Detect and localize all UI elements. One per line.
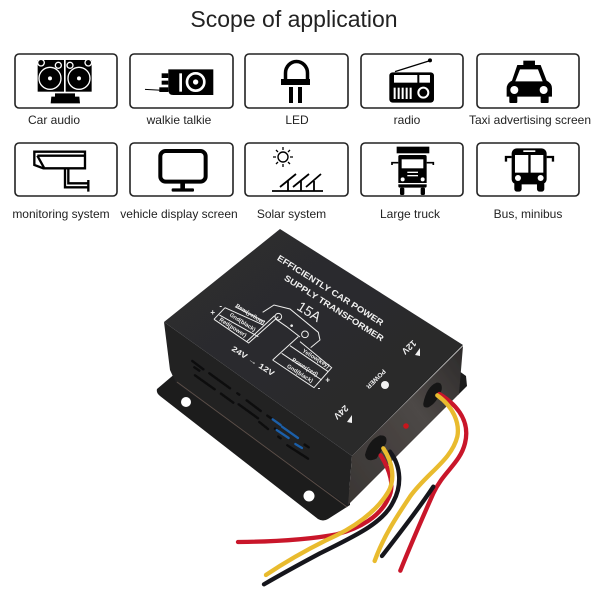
panel: car audio [15, 54, 117, 127]
panel: radio [361, 54, 463, 127]
wiring diagram: + [210, 308, 215, 317]
wires: right group [375, 394, 466, 571]
wiring diagram: Gnd(black) [285, 364, 314, 385]
top face printing: SUPPLY TRANSFORMER [282, 273, 386, 343]
side wall [164, 322, 352, 506]
top face printing: 15A [294, 298, 325, 325]
product photo: converter [157, 229, 467, 584]
wiring diagram: + [325, 375, 330, 384]
panel: taxi [469, 54, 591, 127]
back flange [450, 368, 467, 395]
wiring diagram: - [219, 301, 222, 310]
wires: left group [238, 448, 399, 584]
fold line [177, 382, 347, 507]
panel: solar system [245, 143, 348, 221]
panel: large truck [361, 143, 463, 221]
panel: radio: radio [394, 113, 421, 127]
panel: walkie talkie [130, 54, 233, 127]
panel: monitoring system: monitoring system [12, 207, 110, 221]
wires [238, 383, 466, 584]
top face printing: 12V [400, 338, 418, 356]
grommets [365, 383, 442, 460]
wiring diagram: Yellow(key) [301, 348, 330, 370]
top face [164, 229, 463, 456]
wiring diagram: Power(red) [290, 357, 319, 378]
right end face [348, 346, 463, 505]
panel: bus, minibus: Bus, minibus [494, 207, 562, 221]
panel: bus, minibus [477, 143, 579, 221]
wiring diagram: Red(power) [218, 317, 247, 339]
panel: vehicle display screen: vehicle display screen [120, 207, 238, 221]
top face printing: POWER [364, 367, 387, 390]
wiring diagram [210, 301, 332, 393]
panel: walkie talkie: walkie talkie [146, 113, 212, 127]
panel: car audio: Car audio [28, 113, 80, 127]
vent slots [192, 361, 309, 459]
top face printing: EFFICIENTLY CAR POWER [275, 253, 385, 328]
top face printing [230, 253, 420, 423]
panel: monitoring system [12, 143, 117, 221]
flange holes [181, 397, 314, 502]
mounting flange [157, 372, 350, 520]
wiring diagram: Rem(yellow) [234, 303, 266, 326]
top face printing: 24V → 12V [230, 344, 276, 378]
wiring diagram: Gnd(black) [228, 312, 256, 333]
panel: vehicle display screen [120, 143, 238, 221]
panel: large truck: Large truck [380, 207, 441, 221]
panel: taxi: Taxi advertising screen [469, 113, 591, 127]
power LED [403, 423, 409, 429]
panel: LED: LED [285, 113, 309, 127]
top face printing: 24V [332, 403, 350, 421]
wiring diagram: - [318, 384, 321, 393]
panel: LED [245, 54, 348, 127]
panel: solar system: Solar system [257, 207, 326, 221]
title: Scope of application [190, 6, 398, 32]
